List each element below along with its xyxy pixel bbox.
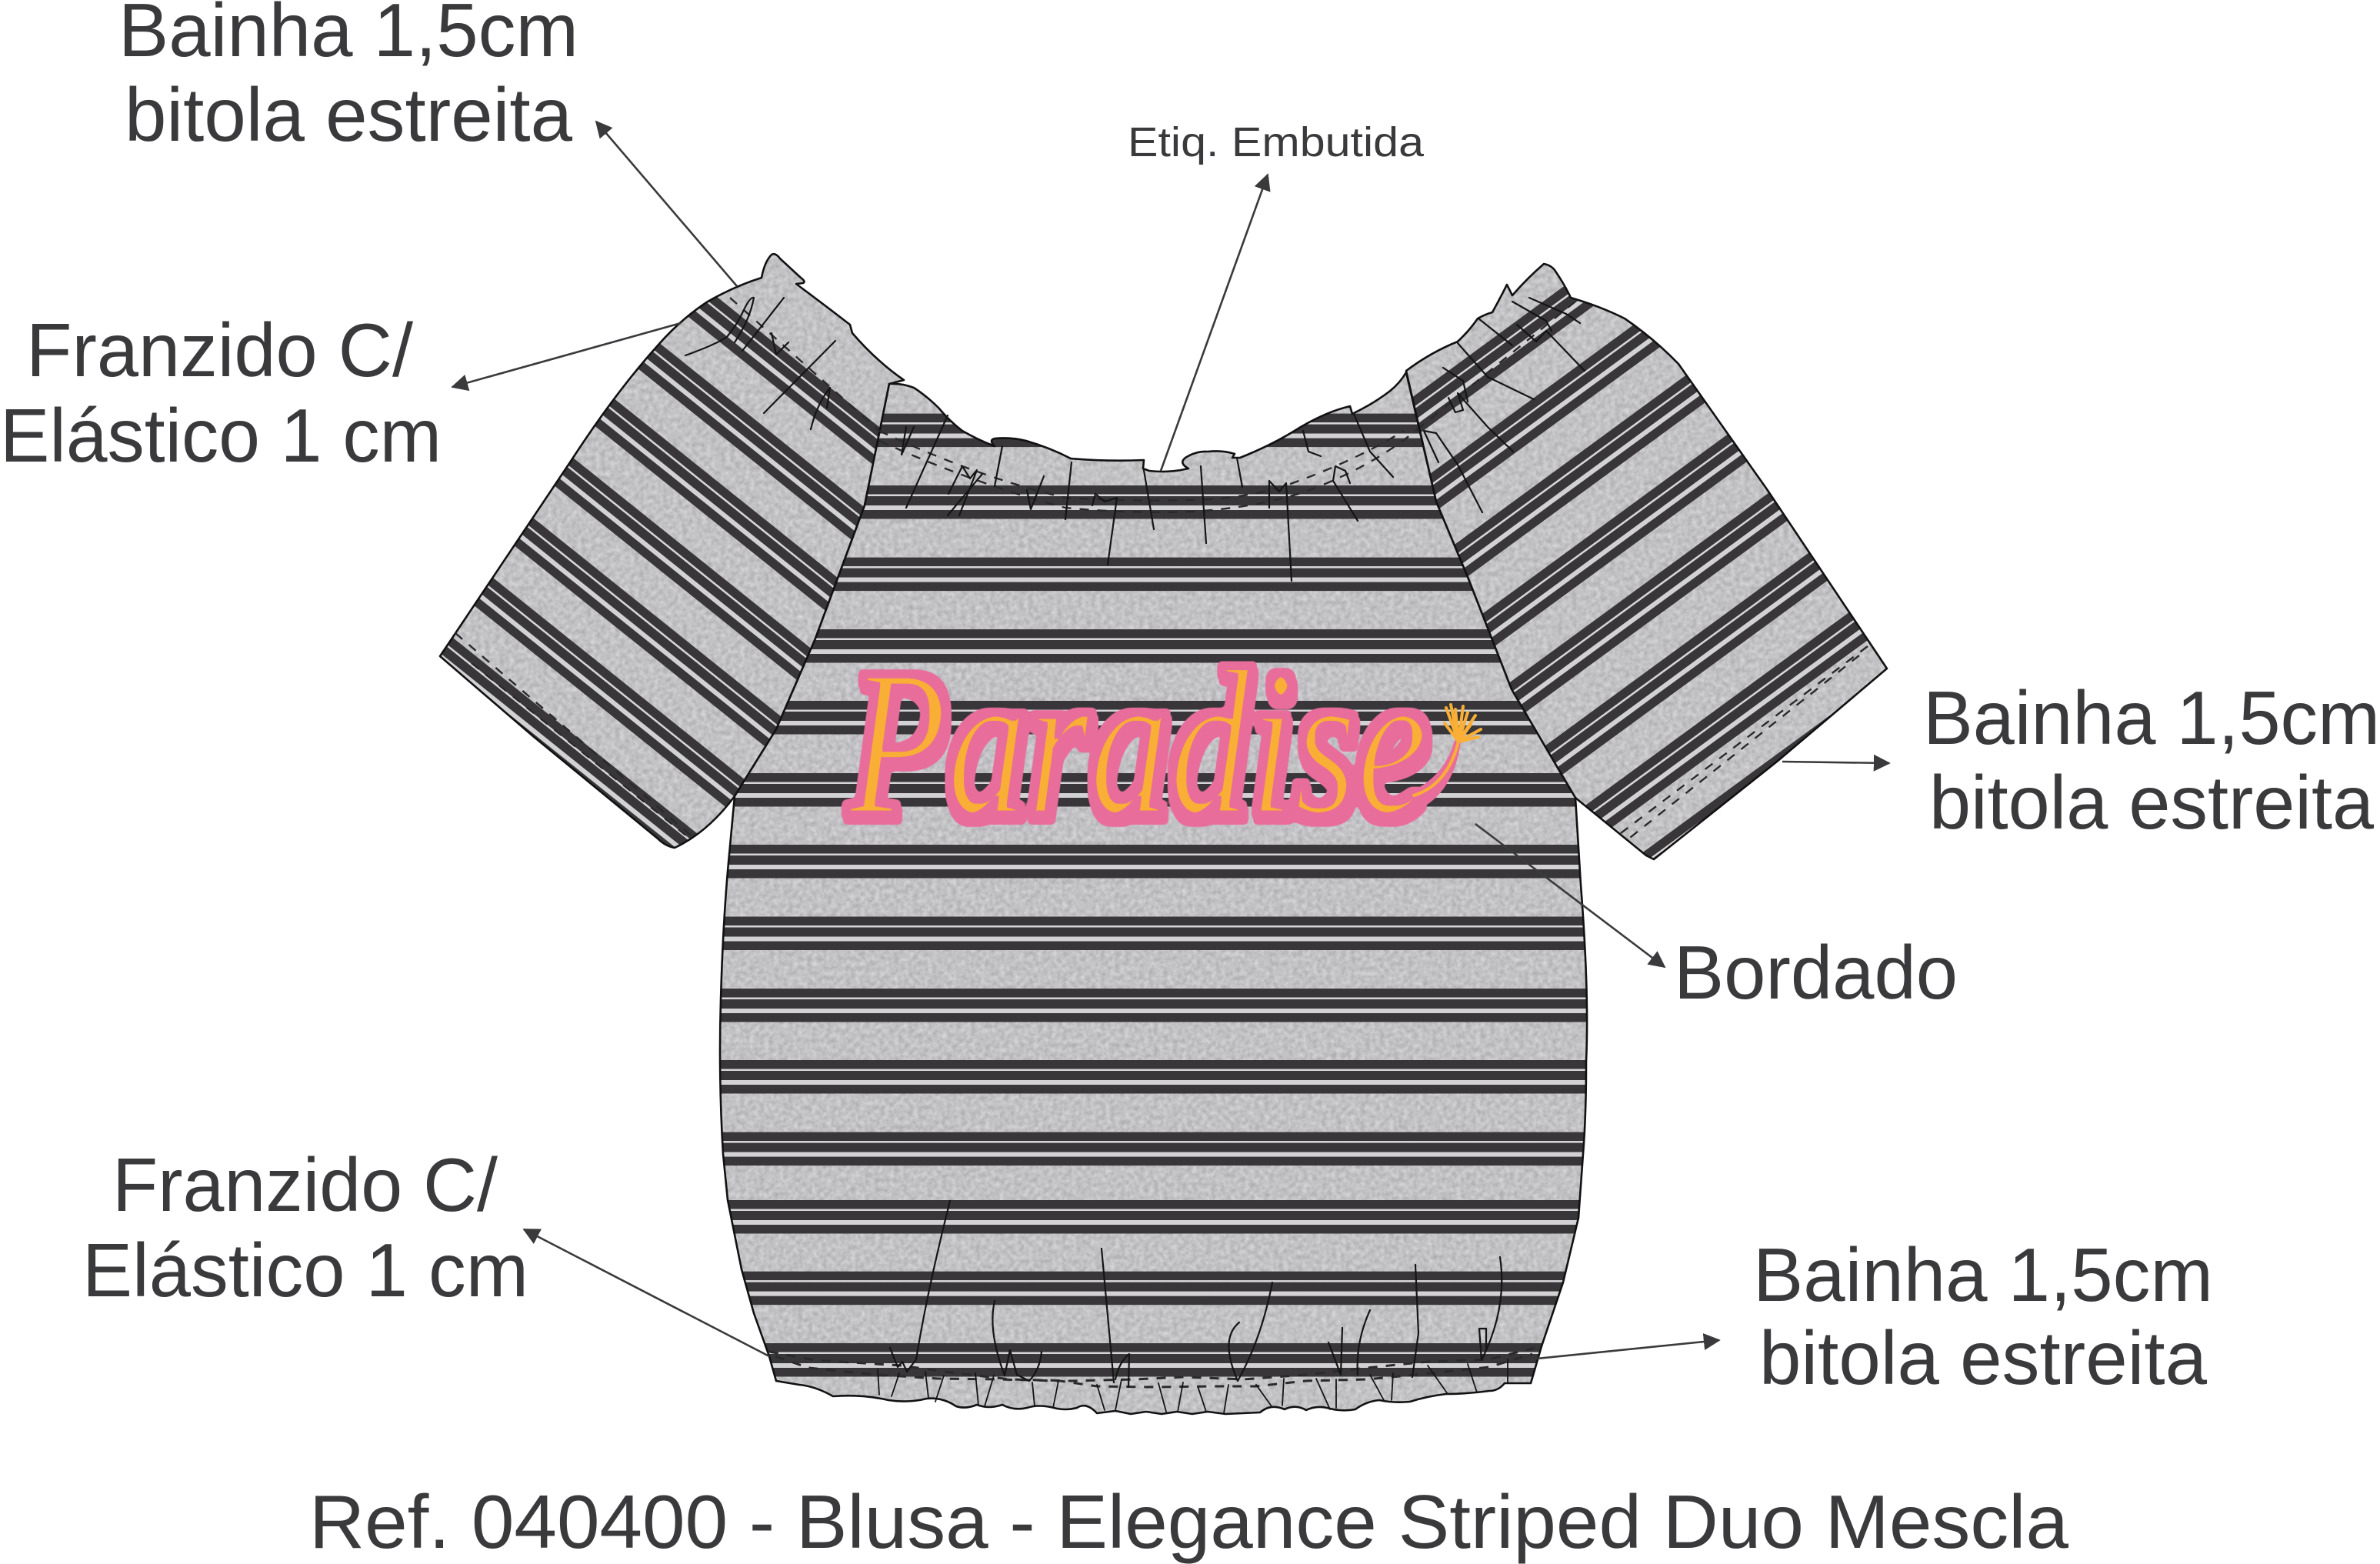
callout: bottom hem bbox=[1753, 1232, 2213, 1400]
tassel bbox=[1414, 705, 1481, 795]
callout: right sleeve hem: bitola estreita bbox=[1929, 760, 2374, 845]
callout: bottom elastic gather: Elástico 1 cm bbox=[82, 1228, 528, 1312]
blouse body bbox=[692, 362, 1615, 1423]
callout: bottom hem: bitola estreita bbox=[1759, 1316, 2207, 1400]
embroidery tail bbox=[1396, 740, 1461, 814]
embroidered word: Paradise bbox=[847, 628, 1428, 858]
neckline stitching bbox=[879, 429, 1418, 512]
callout: left shoulder gather: Franzido C/ bbox=[26, 308, 414, 392]
callout: right sleeve hem: Bainha 1,5cm bbox=[1923, 675, 2380, 760]
bottom hem gathers bbox=[878, 1201, 1508, 1413]
arrow: top-left hem bbox=[596, 122, 737, 286]
callout: embroidery: Bordado bbox=[1674, 930, 1958, 1015]
right sleeve bbox=[1405, 263, 1888, 860]
garment: striped blouse bbox=[438, 252, 1888, 1416]
neckline gathers bbox=[902, 414, 1393, 581]
callout: left shoulder gather bbox=[0, 308, 442, 478]
bottom hem stitching bbox=[769, 1346, 1542, 1387]
callout: right sleeve hem bbox=[1923, 675, 2380, 845]
callout: bottom elastic gather: Franzido C/ bbox=[112, 1142, 498, 1227]
arrow: embroidery bbox=[1475, 824, 1665, 967]
arrow: embedded label bbox=[1161, 175, 1268, 471]
title: reference line: Ref. 040400 - Blusa - Elegance Striped Duo Mescla bbox=[309, 1479, 2068, 1564]
callout: embedded label: Etiq. Embutida bbox=[1128, 119, 1425, 165]
embroidery: Paradise lettering bbox=[847, 628, 1481, 858]
arrow: bottom elastic gather bbox=[524, 1229, 769, 1356]
arrow: left shoulder gather bbox=[452, 323, 681, 387]
callout: top-left hem: bitola estreita bbox=[125, 72, 572, 157]
callout: bottom elastic gather bbox=[82, 1142, 528, 1312]
callout: top-left hem bbox=[118, 0, 578, 157]
arrow: bottom hem bbox=[1537, 1340, 1719, 1359]
callout: left shoulder gather: Elástico 1 cm bbox=[0, 393, 442, 478]
arrow: right sleeve hem bbox=[1782, 762, 1889, 763]
callout: bottom hem: Bainha 1,5cm bbox=[1753, 1232, 2213, 1317]
left sleeve bbox=[438, 252, 905, 849]
